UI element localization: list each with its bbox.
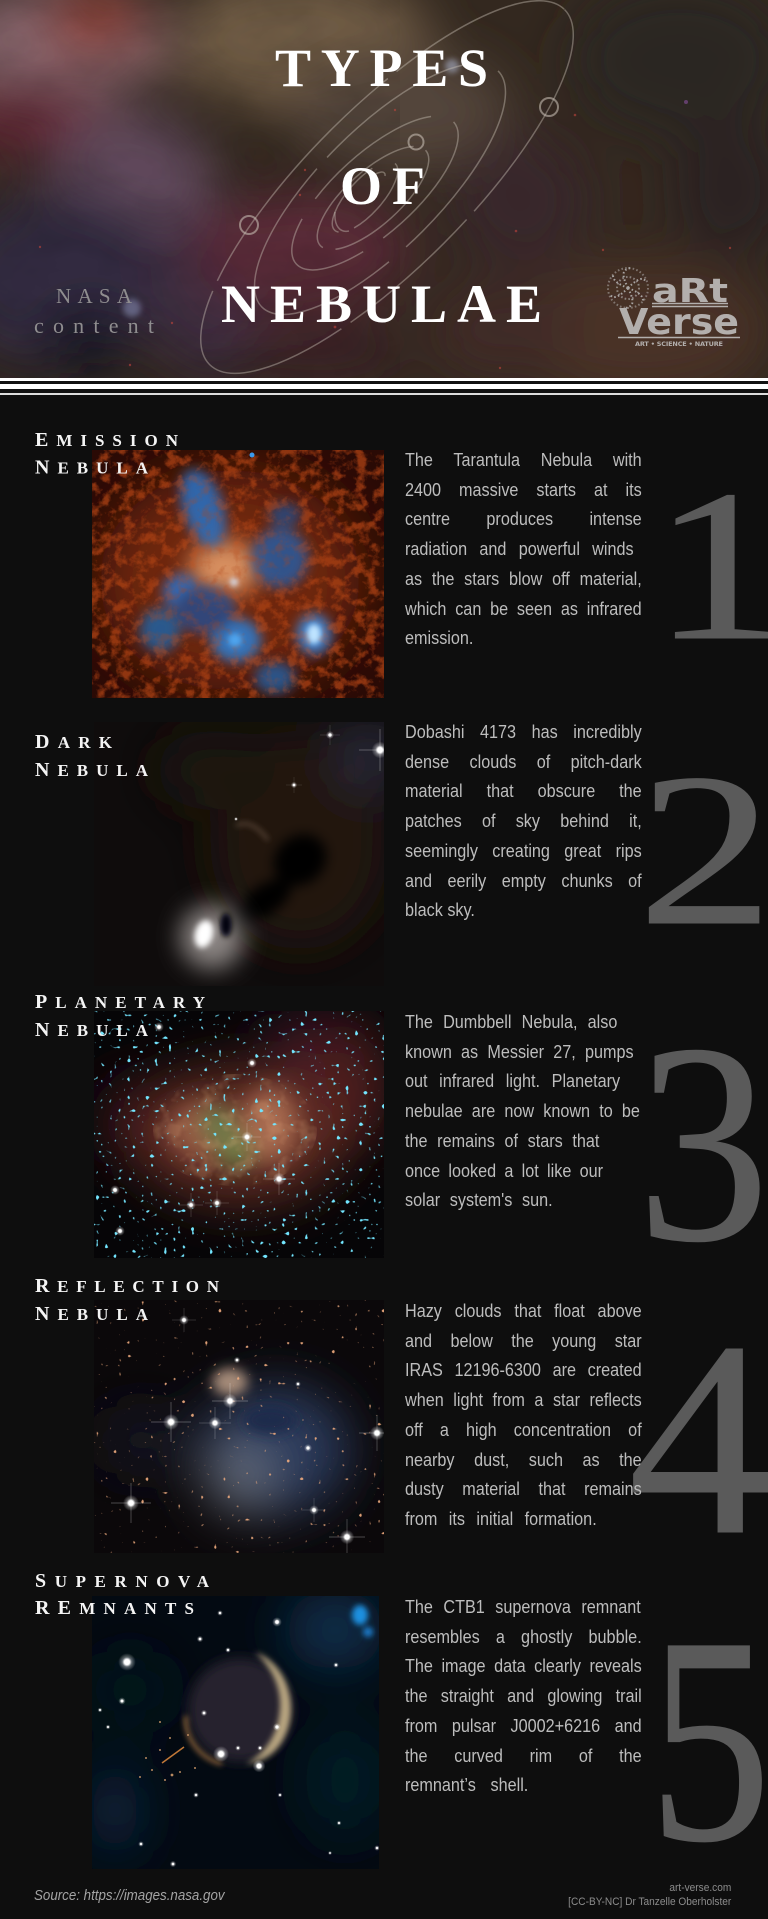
body text (405, 450, 642, 648)
body text: dusty material that remains (405, 1479, 642, 1499)
body text: resembles a ghostly bubble. (405, 1627, 642, 1647)
heading (35, 991, 205, 1041)
image: dobashi 4173 (164, 722, 384, 985)
body text: The Dumbbell Nebula, also (405, 1012, 617, 1032)
panel: reflection nebula (35, 1275, 768, 1555)
body text: Dobashi 4173 has incredibly (405, 722, 642, 742)
body text: nearby dust, such as the (405, 1450, 642, 1470)
heading: P LANETARY (35, 991, 205, 1013)
body text: IRAS 12196-6300 are created (405, 1360, 642, 1380)
panel: supernova remnants (35, 1570, 768, 1870)
body text: which can be seen as infrared (405, 599, 642, 619)
hero banner (0, 0, 768, 395)
title: OF (340, 156, 425, 216)
heading: S UPERNOVA (35, 1570, 210, 1592)
body text: The Tarantula Nebula with (405, 450, 642, 470)
orbit diagram (200, 0, 574, 374)
heading (35, 1275, 220, 1325)
body text: nebulae are now known to be (405, 1101, 640, 1121)
hero nebula background (0, 0, 768, 378)
body text: the straight and glowing trail (405, 1686, 642, 1706)
body text: the remains of stars that (405, 1131, 599, 1151)
image: ctb1 supernova remnant (92, 1596, 379, 1869)
body text (405, 1597, 642, 1795)
stripe band (0, 378, 768, 395)
title: NEBULAE (221, 274, 542, 334)
heading (35, 1570, 210, 1619)
body text: centre produces intense (405, 509, 642, 529)
body text: known as Messier 27, pumps (405, 1042, 634, 1062)
body text: 2400 massive starts at its (405, 480, 642, 500)
body text: solar system's sun. (405, 1190, 553, 1210)
body text (405, 722, 642, 920)
panel: planetary nebula (35, 990, 768, 1260)
nasa content label (34, 284, 154, 338)
body text: material that obscure the (405, 781, 642, 801)
body text: from pulsar J0002+6216 and (405, 1716, 642, 1736)
heading: D ARK (35, 731, 113, 753)
logo: art verse: Verse (619, 302, 739, 343)
logo: art verse: ART • SCIENCE • NATURE (635, 340, 723, 348)
body text: the curved rim of the (405, 1746, 642, 1766)
body text: Hazy clouds that float above (405, 1301, 642, 1321)
nasa content label: content (34, 313, 154, 338)
body text (405, 1301, 642, 1529)
heading: RE MNANTS (35, 1597, 194, 1619)
body text: from its initial formation. (405, 1509, 597, 1529)
body text: radiation and powerful winds (405, 539, 634, 559)
body text: remnant’s shell. (405, 1775, 528, 1795)
body text: patches of sky behind it, (405, 811, 642, 831)
body text: seemingly creating great rips (405, 841, 642, 861)
body text: when light from a star reflects (405, 1390, 642, 1410)
heading (35, 731, 149, 781)
image: dumbbell nebula (94, 1011, 384, 1258)
body text: out infrared light. Planetary (405, 1071, 620, 1091)
body text (405, 1012, 640, 1210)
panel: dark nebula (35, 722, 768, 985)
panel: emission nebula (35, 430, 768, 698)
title: TYPES (275, 38, 488, 98)
body text: The CTB1 supernova remnant (405, 1597, 641, 1617)
heading: N EBULA (35, 456, 149, 478)
body text: The image data clearly reveals (405, 1656, 642, 1676)
credit: [CC-BY-NC] Dr Tanzelle Oberholster (568, 1896, 731, 1908)
body text: and below the young star (405, 1331, 642, 1351)
body text: and eerily empty chunks of (405, 871, 642, 891)
credit (568, 1882, 732, 1908)
image: tarantula nebula (92, 450, 384, 698)
credit: art-verse.com (669, 1882, 731, 1894)
heading: N EBULA (35, 1303, 149, 1325)
nasa content label: NASA (56, 284, 133, 308)
body text: off a high concentration of (405, 1420, 642, 1440)
body text: emission. (405, 628, 473, 648)
heading: N EBULA (35, 759, 149, 781)
source note: Source: https://images.nasa.gov (34, 1888, 225, 1904)
heading: R EFLECTION (35, 1275, 220, 1297)
image: iras 12196-6300 (94, 1300, 384, 1553)
body text: as the stars blow off material, (405, 569, 642, 589)
logo: art verse (607, 267, 740, 348)
body text: once looked a lot like our (405, 1161, 603, 1181)
body text: dense clouds of pitch-dark (405, 752, 642, 772)
title (221, 38, 542, 334)
heading: N EBULA (35, 1019, 149, 1041)
heading (35, 430, 179, 478)
logo: art verse: aRt (652, 271, 728, 310)
body text: black sky. (405, 900, 475, 920)
